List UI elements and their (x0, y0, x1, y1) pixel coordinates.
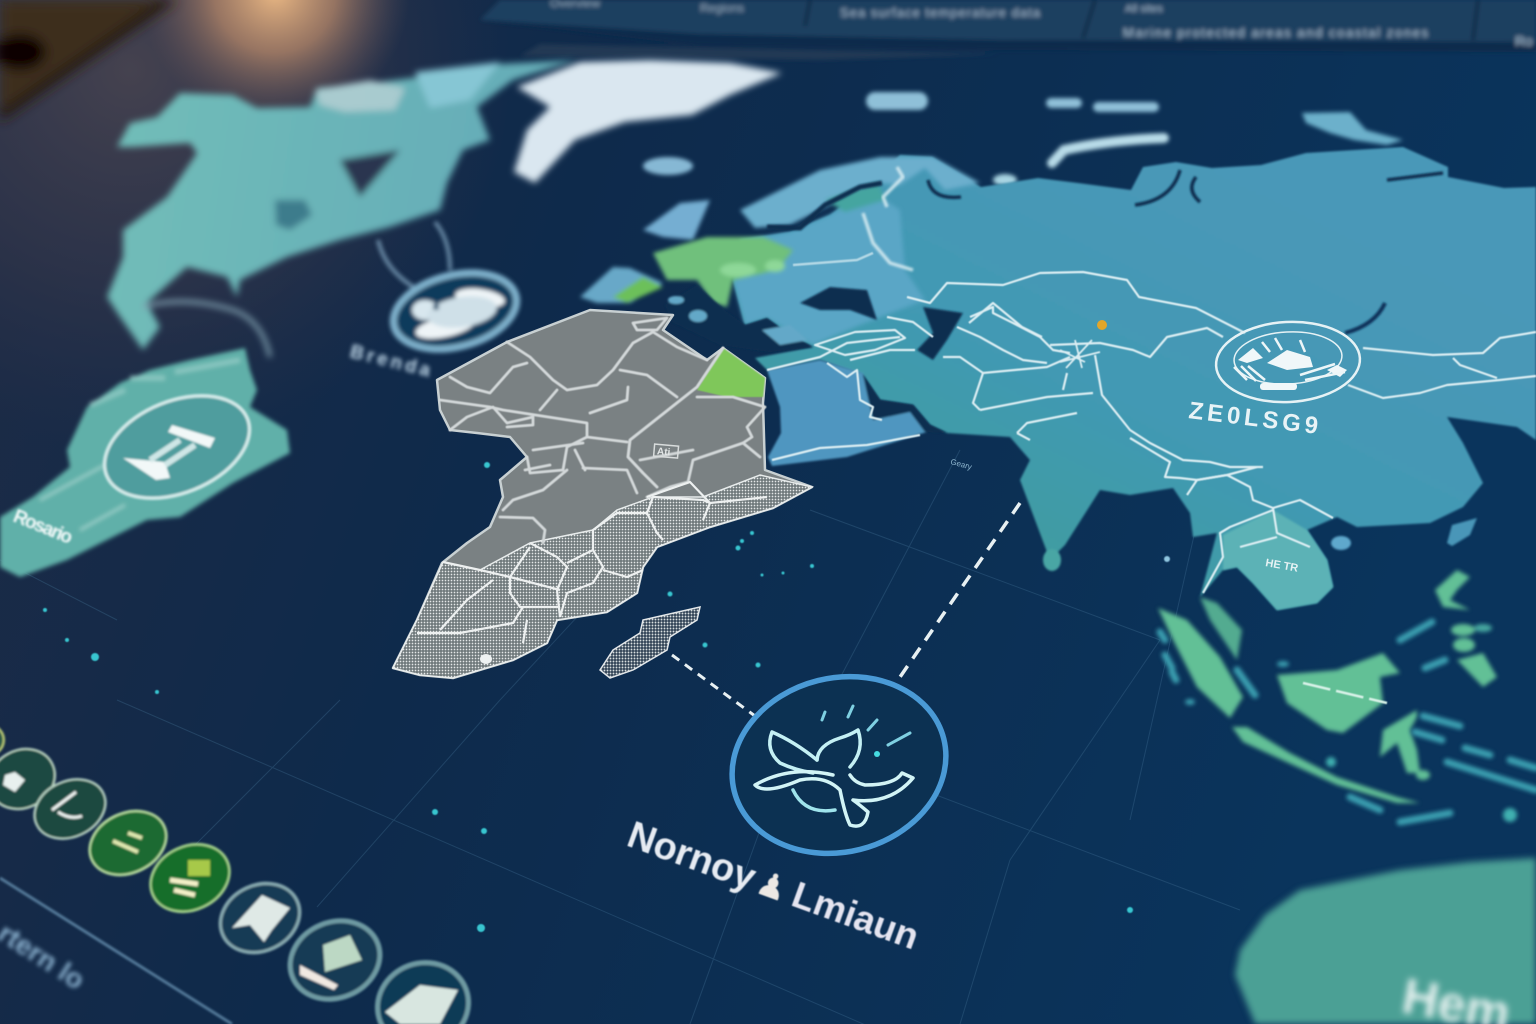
grid lines (0, 420, 1240, 1024)
badge 5 (209, 871, 311, 965)
map: Europe green highlights (653, 237, 793, 307)
top status bar: Regions (700, 1, 744, 15)
map: Arabian peninsula (767, 360, 947, 466)
map: Greenland (514, 60, 782, 183)
dashed connector: Madagascar to lotus (672, 655, 755, 716)
Asia label: ZE0LSG9 (1187, 397, 1320, 440)
top status bar: Sea surface temperature data (840, 5, 1041, 20)
badge 1 (0, 737, 66, 821)
icon: Asia emblem (1214, 318, 1362, 406)
top status bar: All sites (1125, 3, 1163, 15)
top left table corner (0, 0, 178, 122)
icon: Africa pale marker (480, 654, 492, 664)
dashed connector: India to lotus (900, 503, 1020, 677)
map: North America (107, 60, 577, 357)
map: South America (0, 348, 290, 577)
map: Indochina and Sri Lanka (1043, 510, 1333, 610)
map: green region near Red Sea (697, 348, 765, 397)
map: line across Borneo (1303, 683, 1387, 703)
label box in Africa: Ati (657, 446, 671, 458)
orange marker (1097, 320, 1107, 330)
map: Eurasia landmass (733, 147, 1536, 610)
category badge row (0, 723, 481, 1024)
map: Southeast Asian islands (1158, 570, 1497, 803)
badge 2 (25, 768, 115, 850)
lotus label: Lmiaun (787, 874, 924, 957)
badge 7 (365, 950, 481, 1024)
North America label: Brenda (348, 341, 433, 382)
badge 4 (139, 832, 241, 924)
map: inland seas (665, 170, 1443, 360)
small label in Indochina: HE TR (1264, 557, 1299, 575)
map: Eastern Europe and Scandinavia (733, 157, 980, 345)
scattered location dots (43, 462, 1170, 932)
map: Taiwan and Hainan (1331, 518, 1477, 550)
badge 6 (278, 908, 392, 1012)
South America label: Rosario (10, 506, 75, 549)
lotus label: ♟ (751, 864, 793, 910)
map: small eastern islands (1160, 622, 1536, 822)
bottom left divider line (0, 878, 232, 1024)
map: Iceland, UK and Iberia (580, 157, 710, 303)
warm light reflection (60, 0, 500, 160)
map: Eurasian borders (767, 167, 1536, 593)
map: Madagascar (600, 607, 700, 678)
label box in Africa (654, 444, 679, 459)
screen haze top left (0, 0, 620, 460)
badge 3 (79, 799, 177, 887)
map: African southern borders (417, 482, 767, 643)
map: Australia (1235, 858, 1536, 1024)
icon: North America badge (378, 222, 525, 361)
map: Arctic islands (866, 92, 1403, 186)
top status bar: Ro (1515, 33, 1533, 49)
badge 0 (0, 723, 4, 757)
lotus label: Nornoy (622, 814, 761, 899)
top status bar: Marine protected areas and coastal zones (1123, 25, 1428, 40)
lotus label (622, 814, 924, 958)
icon: South America badge (89, 376, 265, 518)
small label on Arabian Sea: Geary (949, 457, 973, 472)
icon: lotus badge (713, 654, 965, 876)
top status bar (480, 0, 1536, 60)
map: Africa (393, 310, 812, 678)
map: African northern borders (440, 318, 765, 543)
